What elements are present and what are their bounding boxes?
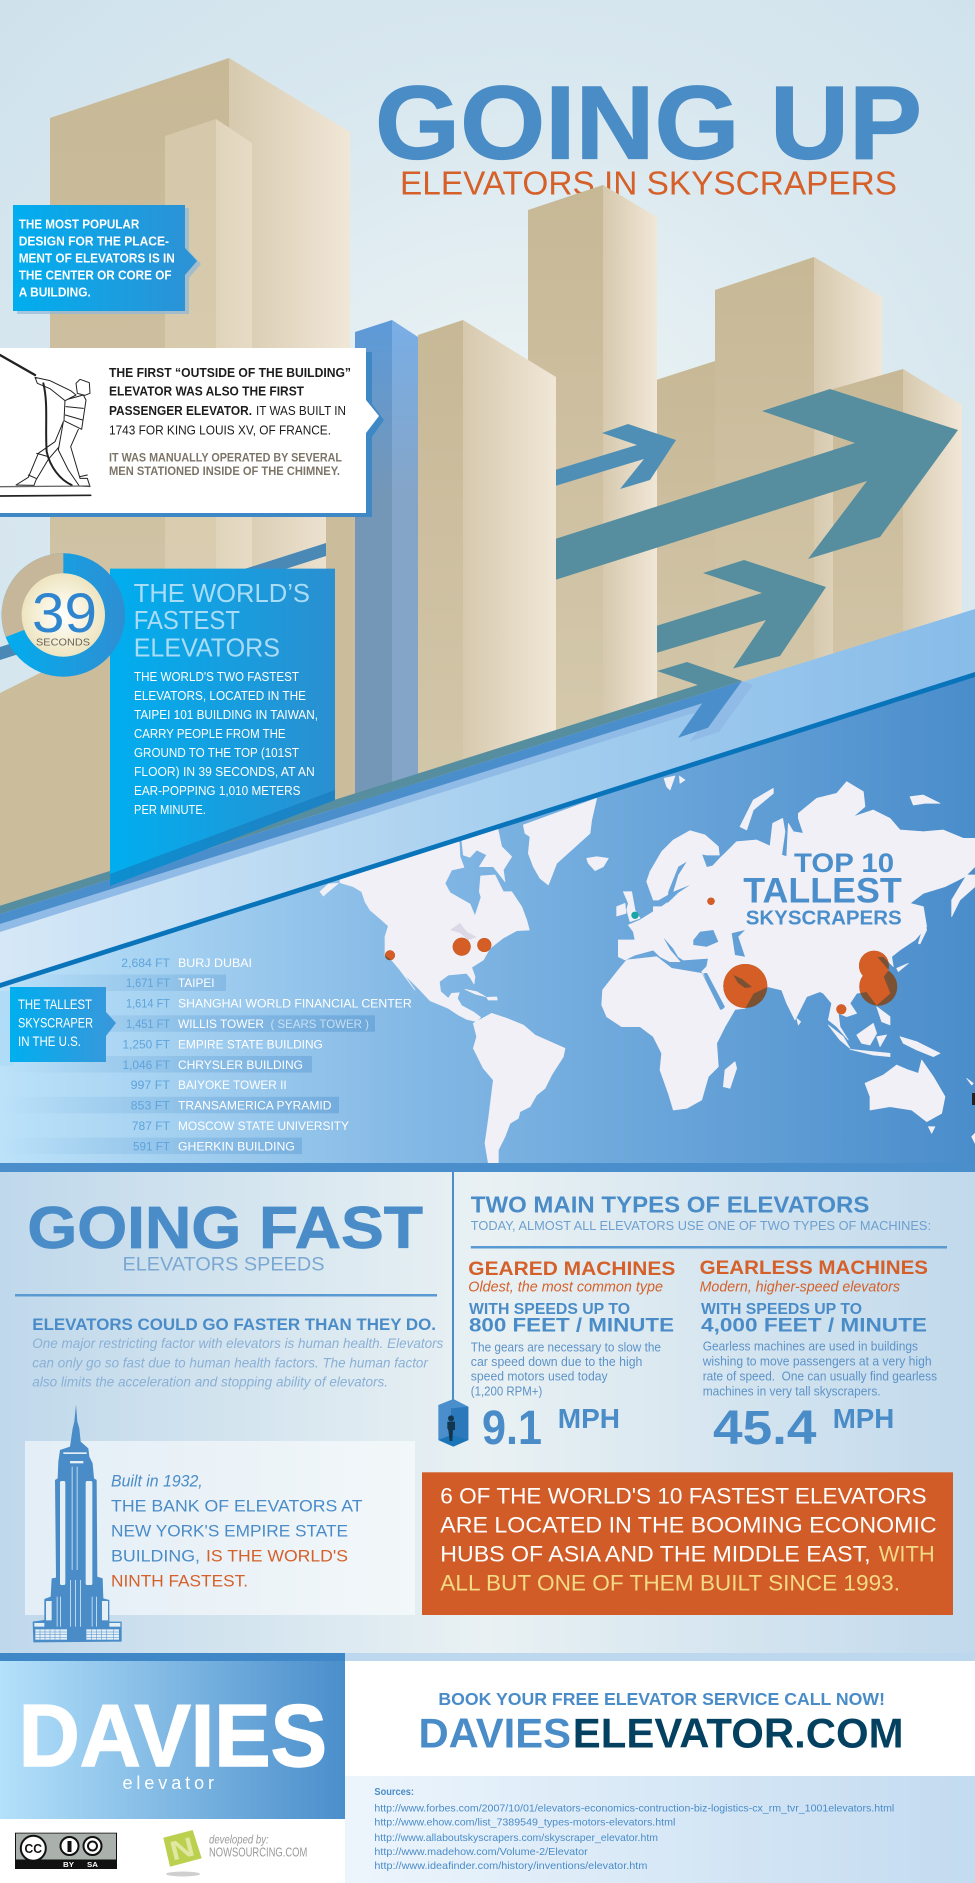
icon: empire state building xyxy=(33,1404,122,1642)
text: human health: ELEVATORS COULD GO FASTER THAN THEY DO. xyxy=(32,1316,436,1334)
text: human health: can only go so fast due to human health factors. The human factor xyxy=(32,1354,429,1370)
callout: tallest in the u.s.: IN THE U.S. xyxy=(18,1033,81,1049)
icon: creative commons badge: BY xyxy=(63,1862,74,1869)
speed: 45.4 mph: MPH xyxy=(833,1403,894,1434)
icon: elevator car xyxy=(438,1399,468,1447)
building: middle xyxy=(418,320,556,900)
callout: orange fastest elevators: ARE LOCATED IN THE BOOMING ECONOMIC xyxy=(440,1512,937,1537)
callout: orange fastest elevators: WITH xyxy=(879,1542,935,1567)
subtitle: ELEVATORS IN SKYSCRAPERS xyxy=(400,164,897,202)
column: geared machines xyxy=(468,1258,675,1399)
list heights: 1,671 FT xyxy=(126,976,171,990)
panel: first passenger elevator: ELEVATOR WAS ALSO THE FIRST xyxy=(109,385,304,399)
text: empire state xyxy=(111,1472,363,1591)
callout: tallest in the u.s. xyxy=(0,987,116,1066)
two main types heading: TWO MAIN TYPES OF ELEVATORS xyxy=(471,1191,869,1217)
list heights: 591 FT xyxy=(133,1139,171,1153)
list names xyxy=(178,956,412,1153)
vertical divider with cable xyxy=(452,1172,454,1400)
column: gearless machines xyxy=(700,1257,937,1399)
going fast heading: ELEVATORS SPEEDS xyxy=(122,1254,324,1276)
panel: world's fastest elevators: GROUND TO THE TOP (101ST xyxy=(134,746,299,760)
callout: core placement: DESIGN FOR THE PLACE- xyxy=(19,235,169,249)
list names: SHANGHAI WORLD FINANCIAL CENTER xyxy=(178,997,412,1011)
text: empire state: Built in 1932, xyxy=(111,1472,203,1491)
panel: world's fastest elevators xyxy=(110,569,335,886)
column: geared machines: GEARED MACHINES xyxy=(468,1258,675,1280)
arrow: fourth head over buildings xyxy=(657,662,742,700)
speed: 45.4 mph xyxy=(713,1402,894,1455)
icon: creative commons badge: CC xyxy=(24,1842,42,1856)
panel: world's fastest elevators: THE WORLD’S xyxy=(134,580,310,608)
map markers over sea xyxy=(385,898,897,1014)
column: gearless machines: Gearless machines are used in buildings xyxy=(703,1340,918,1354)
footer: call to action xyxy=(418,1689,904,1756)
list names: BURJ DUBAI xyxy=(178,956,252,970)
panel: world's fastest elevators: THE WORLD'S TWO FASTEST xyxy=(134,670,299,684)
list names: BAIYOKE TOWER II xyxy=(178,1078,287,1092)
panel: world's fastest elevators: FASTEST xyxy=(134,607,240,635)
column: geared machines: Oldest, the most common type xyxy=(468,1279,663,1296)
map background xyxy=(0,620,975,1164)
badge: 39 seconds: SECONDS xyxy=(36,637,90,649)
panel: world's fastest elevators: FLOOR) IN 39 SECONDS, AT AN xyxy=(134,765,315,779)
dark diagonal line xyxy=(0,672,975,988)
map markers over land xyxy=(385,898,890,1014)
callout: core placement: MENT OF ELEVATORS IS IN xyxy=(19,252,175,266)
list names: GHERKIN BUILDING xyxy=(178,1139,295,1153)
list heights: 997 FT xyxy=(131,1078,171,1092)
column: gearless machines: 4,000 FEET / MINUTE xyxy=(701,1315,927,1337)
list row bars xyxy=(0,974,375,1154)
arrow: big xyxy=(555,389,958,580)
panel: first passenger elevator: THE FIRST “OUTSIDE OF THE BUILDING” xyxy=(109,366,351,380)
callout: core placement xyxy=(13,205,201,314)
panel: first passenger elevator: IT WAS BUILT IN xyxy=(256,404,346,418)
panel: world's fastest elevators: ELEVATORS, LOCATED IN THE xyxy=(134,689,306,703)
callout: orange fastest elevators: ALL BUT ONE OF THEM BUILT SINCE 1993. xyxy=(440,1571,900,1596)
list heights: 853 FT xyxy=(131,1099,171,1113)
going fast heading: GOING FAST xyxy=(27,1195,423,1261)
building: low filler xyxy=(656,361,715,800)
footer: davies logo: DAVIES xyxy=(19,1686,327,1785)
light diagonal band xyxy=(0,609,975,985)
speed: 9.1 mph xyxy=(482,1402,620,1455)
callout: tallest in the u.s.: SKYSCRAPER xyxy=(18,1015,93,1031)
column: geared machines: car speed down due to the high xyxy=(471,1355,642,1369)
top 10 heading: TOP 10 xyxy=(794,848,894,878)
footer: sources: http://www.forbes.com/2007/10/01/elevators-economics-contruction-biz-logistics-cx_rm_tvr_1001elevators.html xyxy=(374,1803,894,1815)
map bottom bar xyxy=(0,1163,975,1172)
column: geared machines: 800 FEET / MINUTE xyxy=(469,1315,674,1337)
column: geared machines: WITH SPEEDS UP TO xyxy=(469,1301,630,1318)
text: human health: also limits the acceleration and stopping ability of elevators. xyxy=(32,1374,388,1390)
speed: 9.1 mph: 9.1 xyxy=(482,1402,542,1455)
callout: orange fastest elevators: 6 OF THE WORLD'S 10 FASTEST ELEVATORS xyxy=(440,1483,927,1508)
persian gulf inside marker xyxy=(733,975,752,988)
developed by credit: developed by: xyxy=(209,1832,269,1846)
footer bar xyxy=(0,1653,975,1661)
badge: 39 seconds: 39 xyxy=(32,581,97,644)
panel: first passenger elevator: MEN STATIONED INSIDE OF THE CHIMNEY. xyxy=(109,464,340,478)
footer: sources: http://www.ideafinder.com/history/inventions/elevator.htm xyxy=(374,1860,648,1872)
speed: 9.1 mph: MPH xyxy=(558,1403,620,1434)
callout: core placement: THE MOST POPULAR xyxy=(19,218,139,232)
list names: WILLIS TOWER xyxy=(178,1017,264,1031)
world map xyxy=(320,776,975,1163)
building: blue translucent xyxy=(355,320,418,900)
inland seas xyxy=(667,862,745,1010)
column: gearless machines: rate of speed. One can usually find gearless xyxy=(703,1370,937,1384)
speed: 45.4 mph: 45.4 xyxy=(713,1402,817,1455)
top 10 heading: TALLEST xyxy=(743,872,902,911)
callout: core placement: THE CENTER OR CORE OF xyxy=(19,269,172,283)
icon: creative commons badge: SA xyxy=(87,1862,98,1869)
icon: nowsourcing n logo: N xyxy=(167,1832,198,1866)
panel: first passenger elevator: PASSENGER ELEVATOR. xyxy=(109,404,252,418)
callout: orange fastest elevators xyxy=(422,1472,953,1615)
list heights xyxy=(121,956,171,1153)
building: bottom left xyxy=(0,638,110,920)
column: gearless machines: WITH SPEEDS UP TO xyxy=(701,1301,862,1318)
footer: davies logo: elevator xyxy=(122,1773,214,1793)
panel: world's fastest elevators: CARRY PEOPLE FROM THE xyxy=(134,727,286,741)
blue arrow on band xyxy=(0,681,742,924)
arrow: third xyxy=(656,560,826,668)
callout: tallest in the u.s.: THE TALLEST xyxy=(18,996,92,1012)
two main types heading xyxy=(471,1191,931,1233)
icon: creative commons badge xyxy=(15,1833,117,1869)
clipped map glyph xyxy=(972,1093,975,1105)
column: geared machines: (1,200 RPM+) xyxy=(471,1385,542,1399)
list heights: 1,046 FT xyxy=(122,1058,171,1072)
list names: CHRYSLER BUILDING xyxy=(178,1058,303,1072)
column: gearless machines: GEARLESS MACHINES xyxy=(700,1257,928,1279)
text: empire state: BUILDING, xyxy=(111,1547,200,1566)
top 10 heading xyxy=(743,848,902,930)
callout: core placement: A BUILDING. xyxy=(19,285,91,299)
section: going fast background xyxy=(0,1172,975,1653)
footer: call to action: BOOK YOUR FREE ELEVATOR SERVICE CALL NOW! xyxy=(438,1689,885,1709)
tower list xyxy=(0,956,412,1154)
text: human health xyxy=(32,1316,443,1390)
list heights: 2,684 FT xyxy=(121,956,171,970)
panel: world's fastest elevators: TAIPEI 101 BUILDING IN TAIWAN, xyxy=(134,708,318,722)
footer: sources: Sources: xyxy=(374,1786,414,1798)
two main types heading: TODAY, ALMOST ALL ELEVATORS USE ONE OF TWO TYPES OF MACHINES: xyxy=(471,1219,931,1233)
icon: man pulling rope xyxy=(0,355,91,496)
title: going up: GOING UP xyxy=(375,66,922,182)
list names: TRANSAMERICA PYRAMID xyxy=(178,1099,332,1113)
list heights: 1,614 FT xyxy=(126,997,171,1011)
panel: world's fastest elevators: ELEVATORS xyxy=(134,634,280,662)
list names: TAIPEI xyxy=(178,976,214,990)
footer: davies logo xyxy=(0,1661,345,1819)
footer: call to action: ELEVATOR.COM xyxy=(573,1709,904,1756)
callout: orange fastest elevators: HUBS OF ASIA AND THE MIDDLE EAST, xyxy=(440,1542,871,1567)
footer: sources xyxy=(345,1776,975,1883)
badge: 39 seconds xyxy=(2,553,125,677)
developed by credit xyxy=(209,1832,307,1860)
panel: first passenger elevator xyxy=(0,348,384,517)
footer: sources: http://www.ehow.com/list_7389549_types-motors-elevators.html xyxy=(374,1817,675,1829)
great lakes xyxy=(450,923,477,940)
icon: nowsourcing n logo xyxy=(163,1830,202,1876)
developed by credit: NOWSOURCING.COM xyxy=(209,1846,307,1860)
list names: EMPIRE STATE BUILDING xyxy=(178,1037,323,1051)
list heights: 787 FT xyxy=(132,1119,171,1133)
text: human health: One major restricting factor with elevators is human health. Elevators xyxy=(32,1335,443,1351)
arrow shaft behind panel xyxy=(0,543,326,660)
building: far right xyxy=(833,369,962,800)
sky background xyxy=(0,0,975,1172)
footer backdrop xyxy=(0,1653,975,1883)
text: empire state: NINTH FASTEST. xyxy=(111,1572,248,1591)
arrow shadow on band xyxy=(0,681,753,932)
building: centre tall xyxy=(528,185,657,800)
map: old world xyxy=(602,776,975,1143)
footer: call to action: DAVIES xyxy=(418,1709,571,1756)
panel: first passenger elevator: 1743 FOR KING LOUIS XV, OF FRANCE. xyxy=(109,424,331,438)
building: narrow tan column xyxy=(326,390,355,900)
column: gearless machines: wishing to move passengers at a very high xyxy=(702,1355,932,1369)
footer: sources: http://www.madehow.com/Volume-2/Elevator xyxy=(374,1846,588,1858)
arrow: small upper xyxy=(555,424,676,489)
list heights: 1,250 FT xyxy=(122,1037,171,1051)
list names: MOSCOW STATE UNIVERSITY xyxy=(178,1119,349,1133)
top 10 heading: SKYSCRAPERS xyxy=(746,907,902,930)
column: gearless machines: machines in very tall skyscrapers. xyxy=(703,1385,881,1399)
column: gearless machines: Modern, higher-speed elevators xyxy=(700,1279,900,1296)
column: geared machines: The gears are necessary to slow the xyxy=(471,1341,661,1355)
diagonal teal stripe xyxy=(0,681,742,914)
panel: first passenger elevator: IT WAS MANUALLY OPERATED BY SEVERAL xyxy=(109,450,342,464)
building: right large xyxy=(715,257,882,800)
panel: world's fastest elevators: PER MINUTE. xyxy=(134,803,206,817)
footer: sources: http://www.allaboutskyscrapers.com/skyscraper_elevator.htm xyxy=(374,1832,658,1844)
text: empire state: IS THE WORLD'S xyxy=(206,1547,348,1566)
text: empire state: NEW YORK'S EMPIRE STATE xyxy=(111,1522,348,1541)
text: empire state: THE BANK OF ELEVATORS AT xyxy=(111,1497,363,1516)
list heights: 1,451 FT xyxy=(126,1017,171,1031)
column: geared machines: speed motors used today xyxy=(471,1370,608,1384)
panel: empire state text backing xyxy=(25,1441,415,1615)
list names: ( SEARS TOWER ) xyxy=(270,1017,369,1031)
panel: world's fastest elevators: EAR-POPPING 1,010 METERS xyxy=(134,784,300,798)
building: left tall xyxy=(50,58,350,920)
map marker: gherkin xyxy=(631,912,639,919)
map: americas xyxy=(320,798,608,1163)
